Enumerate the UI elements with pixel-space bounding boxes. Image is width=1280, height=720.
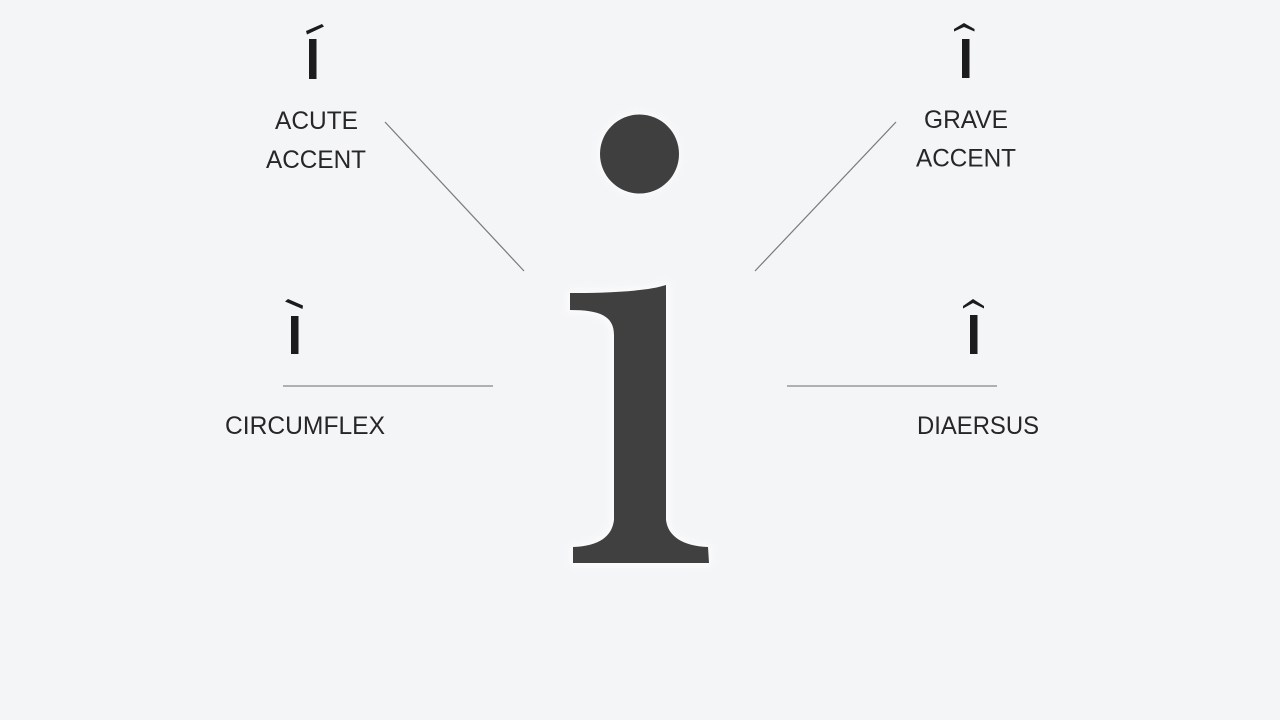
label: acute accent [266, 107, 366, 174]
icon: i with caret mark [963, 299, 984, 354]
icon: i with grave mark [285, 299, 303, 354]
connector: grave accent to letter [755, 122, 896, 271]
label: diaersus: DIAERSUS [917, 412, 1039, 440]
label: acute accent: ACUTE [275, 107, 358, 135]
panel: grave accent [755, 23, 1016, 271]
central letter i [570, 113, 709, 563]
connector: circumflex to letter [283, 385, 493, 387]
connector: diaersus to letter [787, 385, 997, 387]
label: circumflex: CIRCUMFLEX [225, 412, 385, 440]
panel: circumflex [225, 299, 493, 440]
panel: diaersus [787, 299, 1039, 440]
label: grave accent: ACCENT [916, 144, 1016, 172]
icon: i with acute mark [306, 24, 324, 79]
connector: acute accent to letter [385, 122, 524, 271]
icon: i with caret mark [954, 23, 974, 78]
panel: acute accent [266, 24, 524, 271]
label: grave accent: GRAVE [924, 106, 1008, 134]
label: acute accent: ACCENT [266, 146, 366, 174]
label: grave accent [916, 106, 1016, 172]
letter i stem with serifs [570, 285, 709, 563]
letter i dot [598, 113, 680, 195]
